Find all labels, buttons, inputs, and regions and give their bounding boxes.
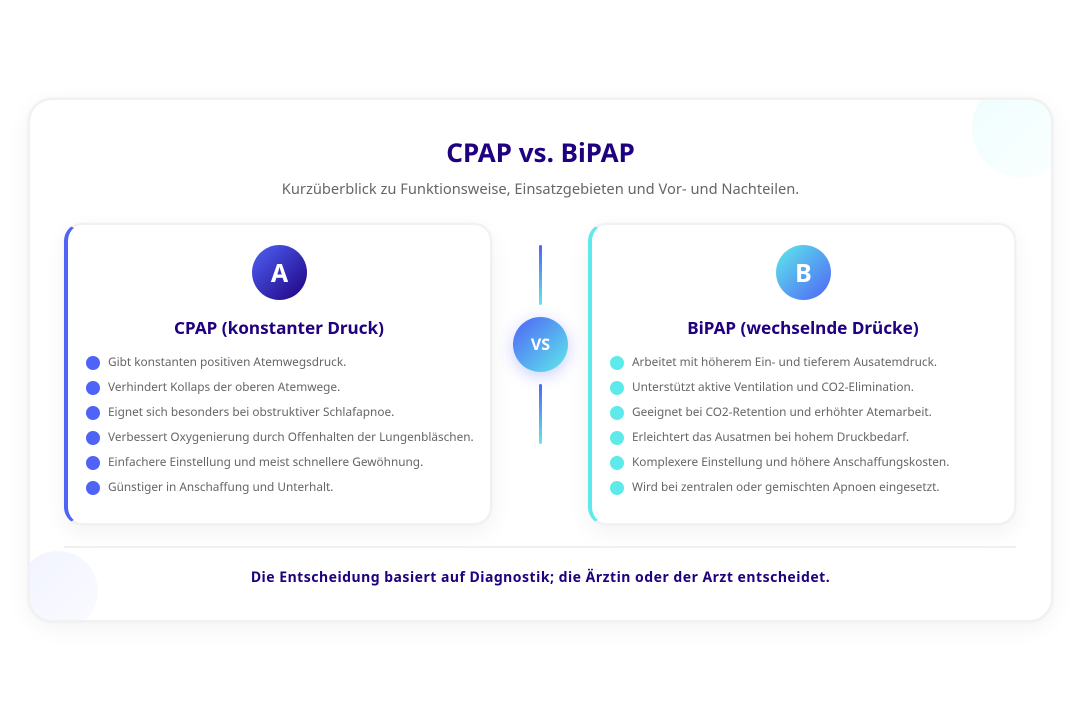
list: BiPAP points: Wird bei zentralen oder gemischten Apnoen eingesetzt. [632,479,940,495]
heading: BiPAP: BiPAP (wechselnde Drücke) [687,317,919,340]
list: CPAP points: Günstiger in Anschaffung und Unterhalt. [108,479,333,495]
heading: CPAP: CPAP (konstanter Druck) [174,317,384,340]
icon: badge A: A [271,256,288,290]
list: CPAP points: Verbessert Oxygenierung durch Offenhalten der Lungenbläschen. [108,429,474,445]
list: BiPAP points: Erleichtert das Ausatmen bei hohem Druckbedarf. [632,429,909,445]
decorative circle bottom left [18,551,98,631]
main card [28,98,1053,622]
title: CPAP vs. BiPAP [446,134,635,170]
icon: badge B [776,245,831,300]
connector line bottom [539,384,542,444]
connector line top [539,245,542,305]
list: BiPAP points: Komplexere Einstellung und höhere Anschaffungskosten. [632,454,949,470]
panel: CPAP [64,223,492,525]
list: CPAP points: Gibt konstanten positiven Atemwegsdruck. [108,354,346,370]
footer statement: Die Entscheidung basiert auf Diagnostik; die Ärztin oder der Arzt entscheidet. [251,568,830,587]
subtitle: Kurzüberblick zu Funktionsweise, Einsatzgebieten und Vor- und Nachteilen. [282,179,799,199]
list: CPAP points: Einfachere Einstellung und meist schnellere Gewöhnung. [108,454,423,470]
list: BiPAP points: Geeignet bei CO2-Retention und erhöhter Atemarbeit. [632,404,932,420]
decorative circle top right [972,78,1072,178]
panel: BiPAP [588,223,1016,525]
icon: VS badge [513,317,568,372]
list: BiPAP points: Arbeitet mit höherem Ein- und tieferem Ausatemdruck. [632,354,937,370]
list: BiPAP points [610,354,949,495]
list: CPAP points: Verhindert Kollaps der oberen Atemwege. [108,379,340,395]
icon: VS badge: VS [531,333,550,355]
decorative circles [30,100,1051,618]
icon: badge A [252,245,307,300]
list: CPAP points [86,354,474,495]
list: CPAP points: Eignet sich besonders bei obstruktiver Schlafapnoe. [108,404,394,420]
list: BiPAP points: Unterstützt aktive Ventilation und CO2-Elimination. [632,379,914,395]
icon: badge B: B [795,256,812,290]
